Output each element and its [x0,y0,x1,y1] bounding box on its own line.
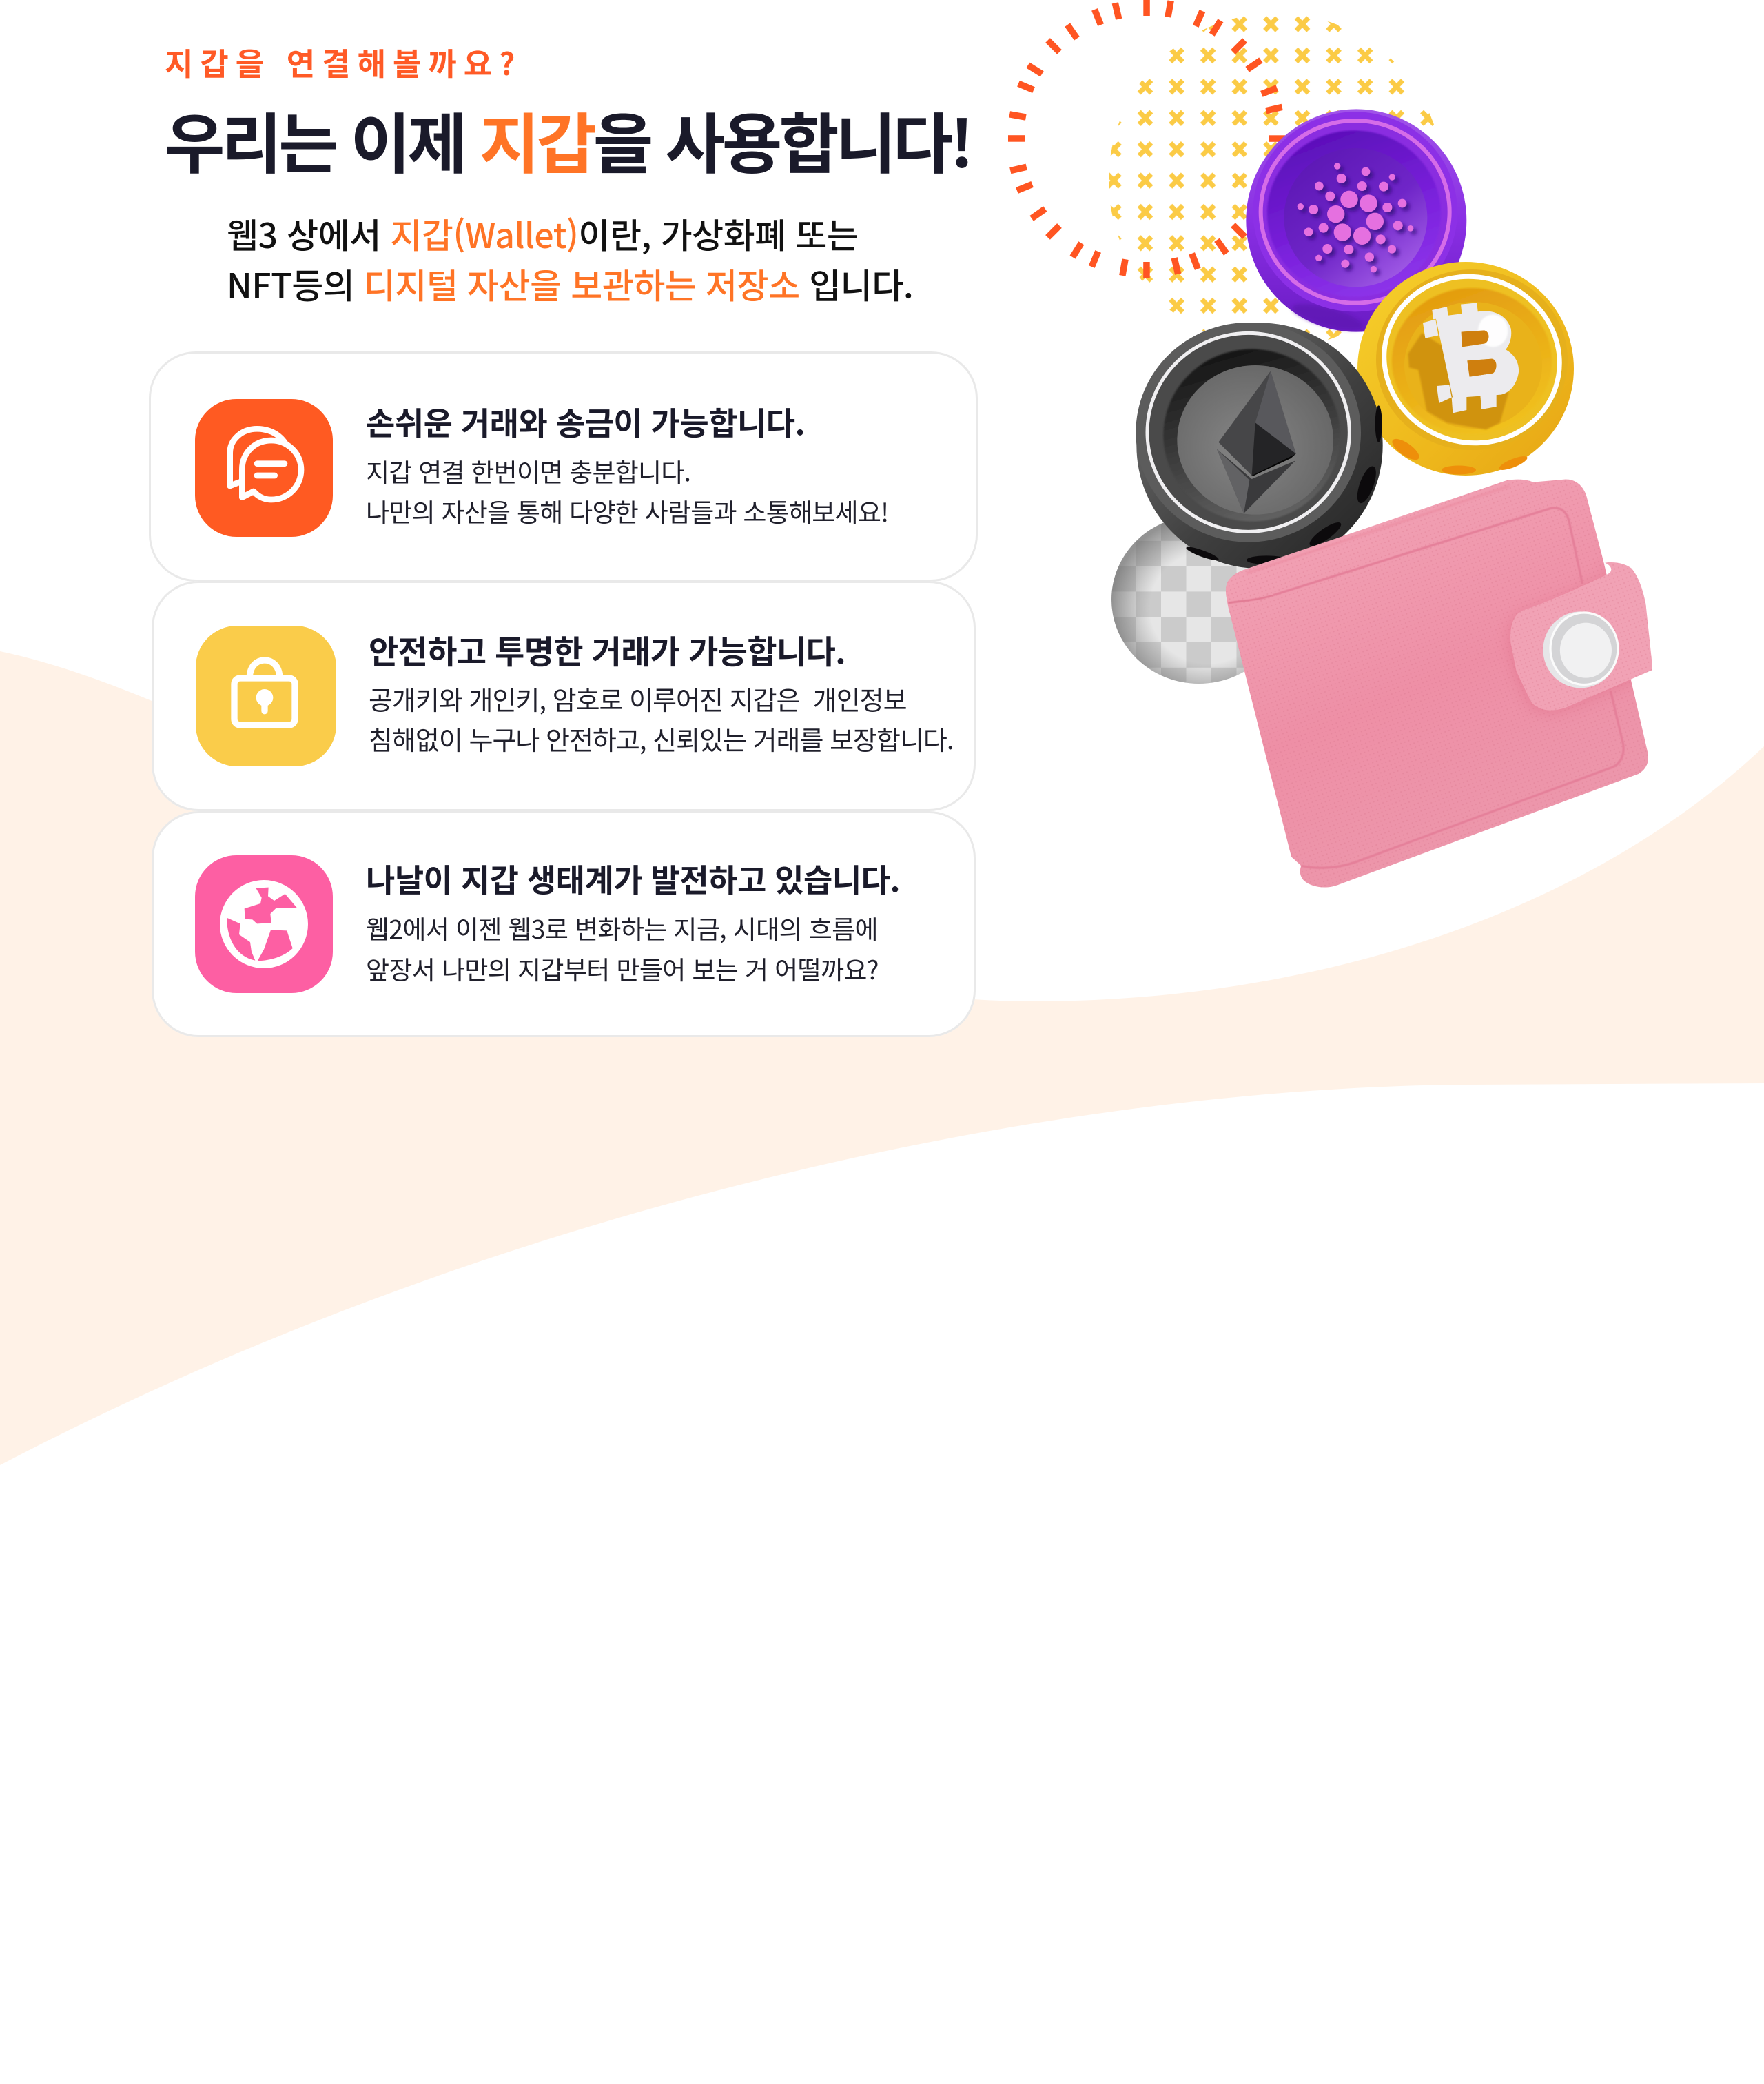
panel: secure transactions [152,581,976,811]
coin: black ethereum [1136,323,1383,569]
card body: 공개키와 개인키, 암호로 이루어진 지갑은 개인정보 침해없이 누구나 안전하고, 신뢰있는 거래를 보장합니다. [369,680,954,757]
panel: growing ecosystem [152,811,976,1037]
eyebrow heading: 지갑을 연결해볼까요? [165,39,522,84]
panel: easy transactions [149,351,978,582]
icon: globe [195,855,333,993]
card title: 나날이 지갑 생태계가 발전하고 있습니다. [366,856,900,901]
wallet strap [1509,562,1653,713]
dashed orange ring [1008,0,1285,278]
icon: chat bubbles [195,399,333,537]
transparent checker sphere [1111,515,1286,684]
card title: 안전하고 투명한 거래가 가능합니다. [369,626,845,673]
icon: padlock [196,626,336,766]
wallet snap button [1543,611,1619,688]
card body: 웹2에서 이젠 웹3로 변화하는 지금, 시대의 흐름에 앞장서 나만의 지갑부터 만들어 보는 거 어떨까요? [366,909,879,987]
card body: 지갑 연결 한번이면 충분합니다. 나만의 자산을 통해 다양한 사람들과 소통해보세요! [366,452,888,529]
dotted x-mark circle pattern [1109,13,1444,348]
main title: 우리는 이제 지갑을 사용합니다! [165,92,971,187]
illustration: coins and wallet [1008,0,1652,888]
card title: 손쉬운 거래와 송금이 가능합니다. [366,399,805,445]
cardano dots [1298,163,1413,272]
coin: purple cardano [1246,109,1466,336]
pink wallet [1226,480,1653,888]
bitcoin symbol [1408,303,1519,429]
coin: yellow bitcoin [1357,254,1581,476]
intro text: 웹3 상에서 지갑(Wallet)이란, 가상화폐 또는 NFT등의 디지털 자산을 보관하는 저장소 입니다. [227,209,913,309]
ethereum diamond [1217,371,1296,513]
wallet body [1226,480,1648,888]
